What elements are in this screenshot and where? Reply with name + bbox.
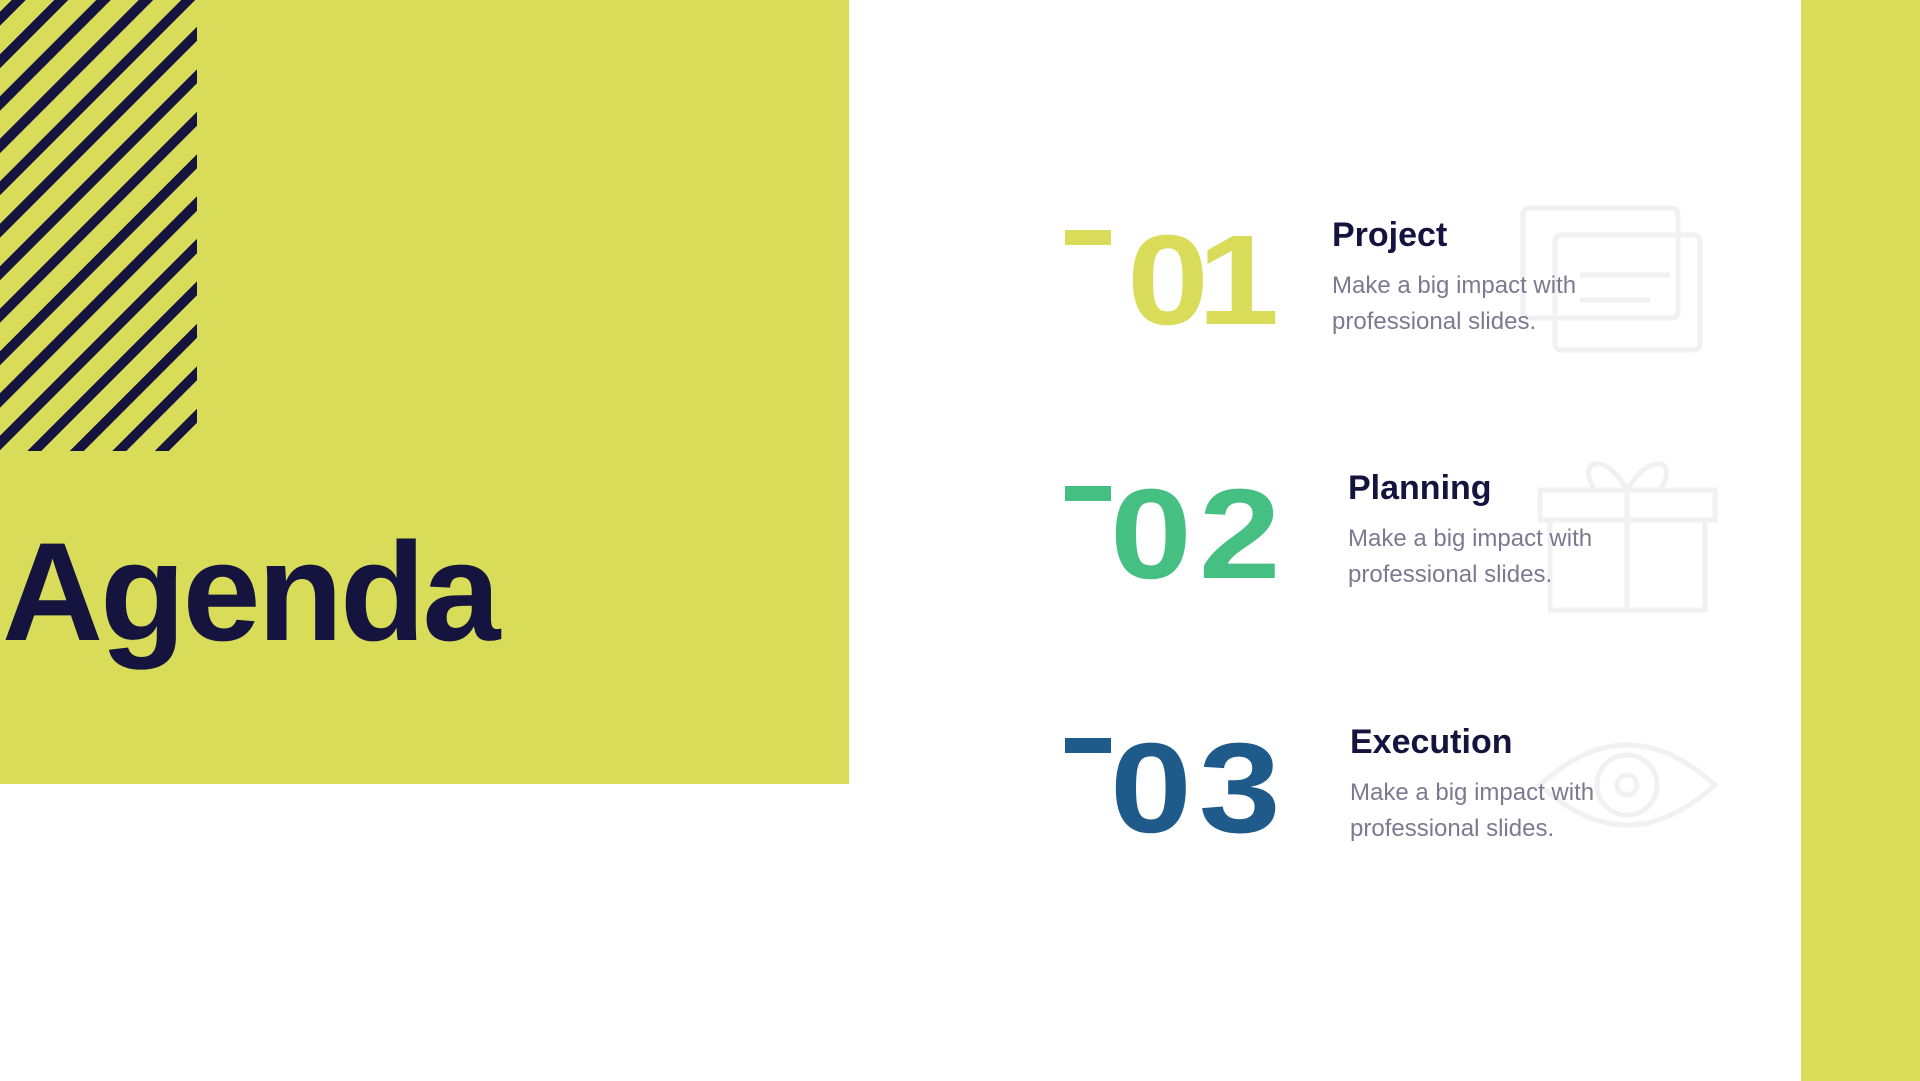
text: 03 [1110,717,1288,860]
text: Make a big impact with [1350,779,1594,806]
title: Agenda [2,513,497,670]
right yellow bar [1801,0,1920,1081]
yellow panel [0,0,849,784]
item 02 [1065,463,1592,606]
item 01 [1065,209,1576,352]
text: Execution [1350,723,1512,761]
text: professional slides. [1348,561,1552,588]
icon: eye [1536,742,1718,828]
text: professional slides. [1332,308,1536,335]
text: 01 [1127,209,1268,352]
text: 02 [1110,463,1288,606]
icon: gift [1538,461,1718,612]
item 03 [1065,717,1594,860]
icon: document [1520,206,1702,352]
text: Make a big impact with [1332,272,1576,299]
text: Planning [1348,469,1492,507]
text: professional slides. [1350,815,1554,842]
stripes pattern [0,0,197,451]
text: Make a big impact with [1348,525,1592,552]
text: Project [1332,216,1447,254]
